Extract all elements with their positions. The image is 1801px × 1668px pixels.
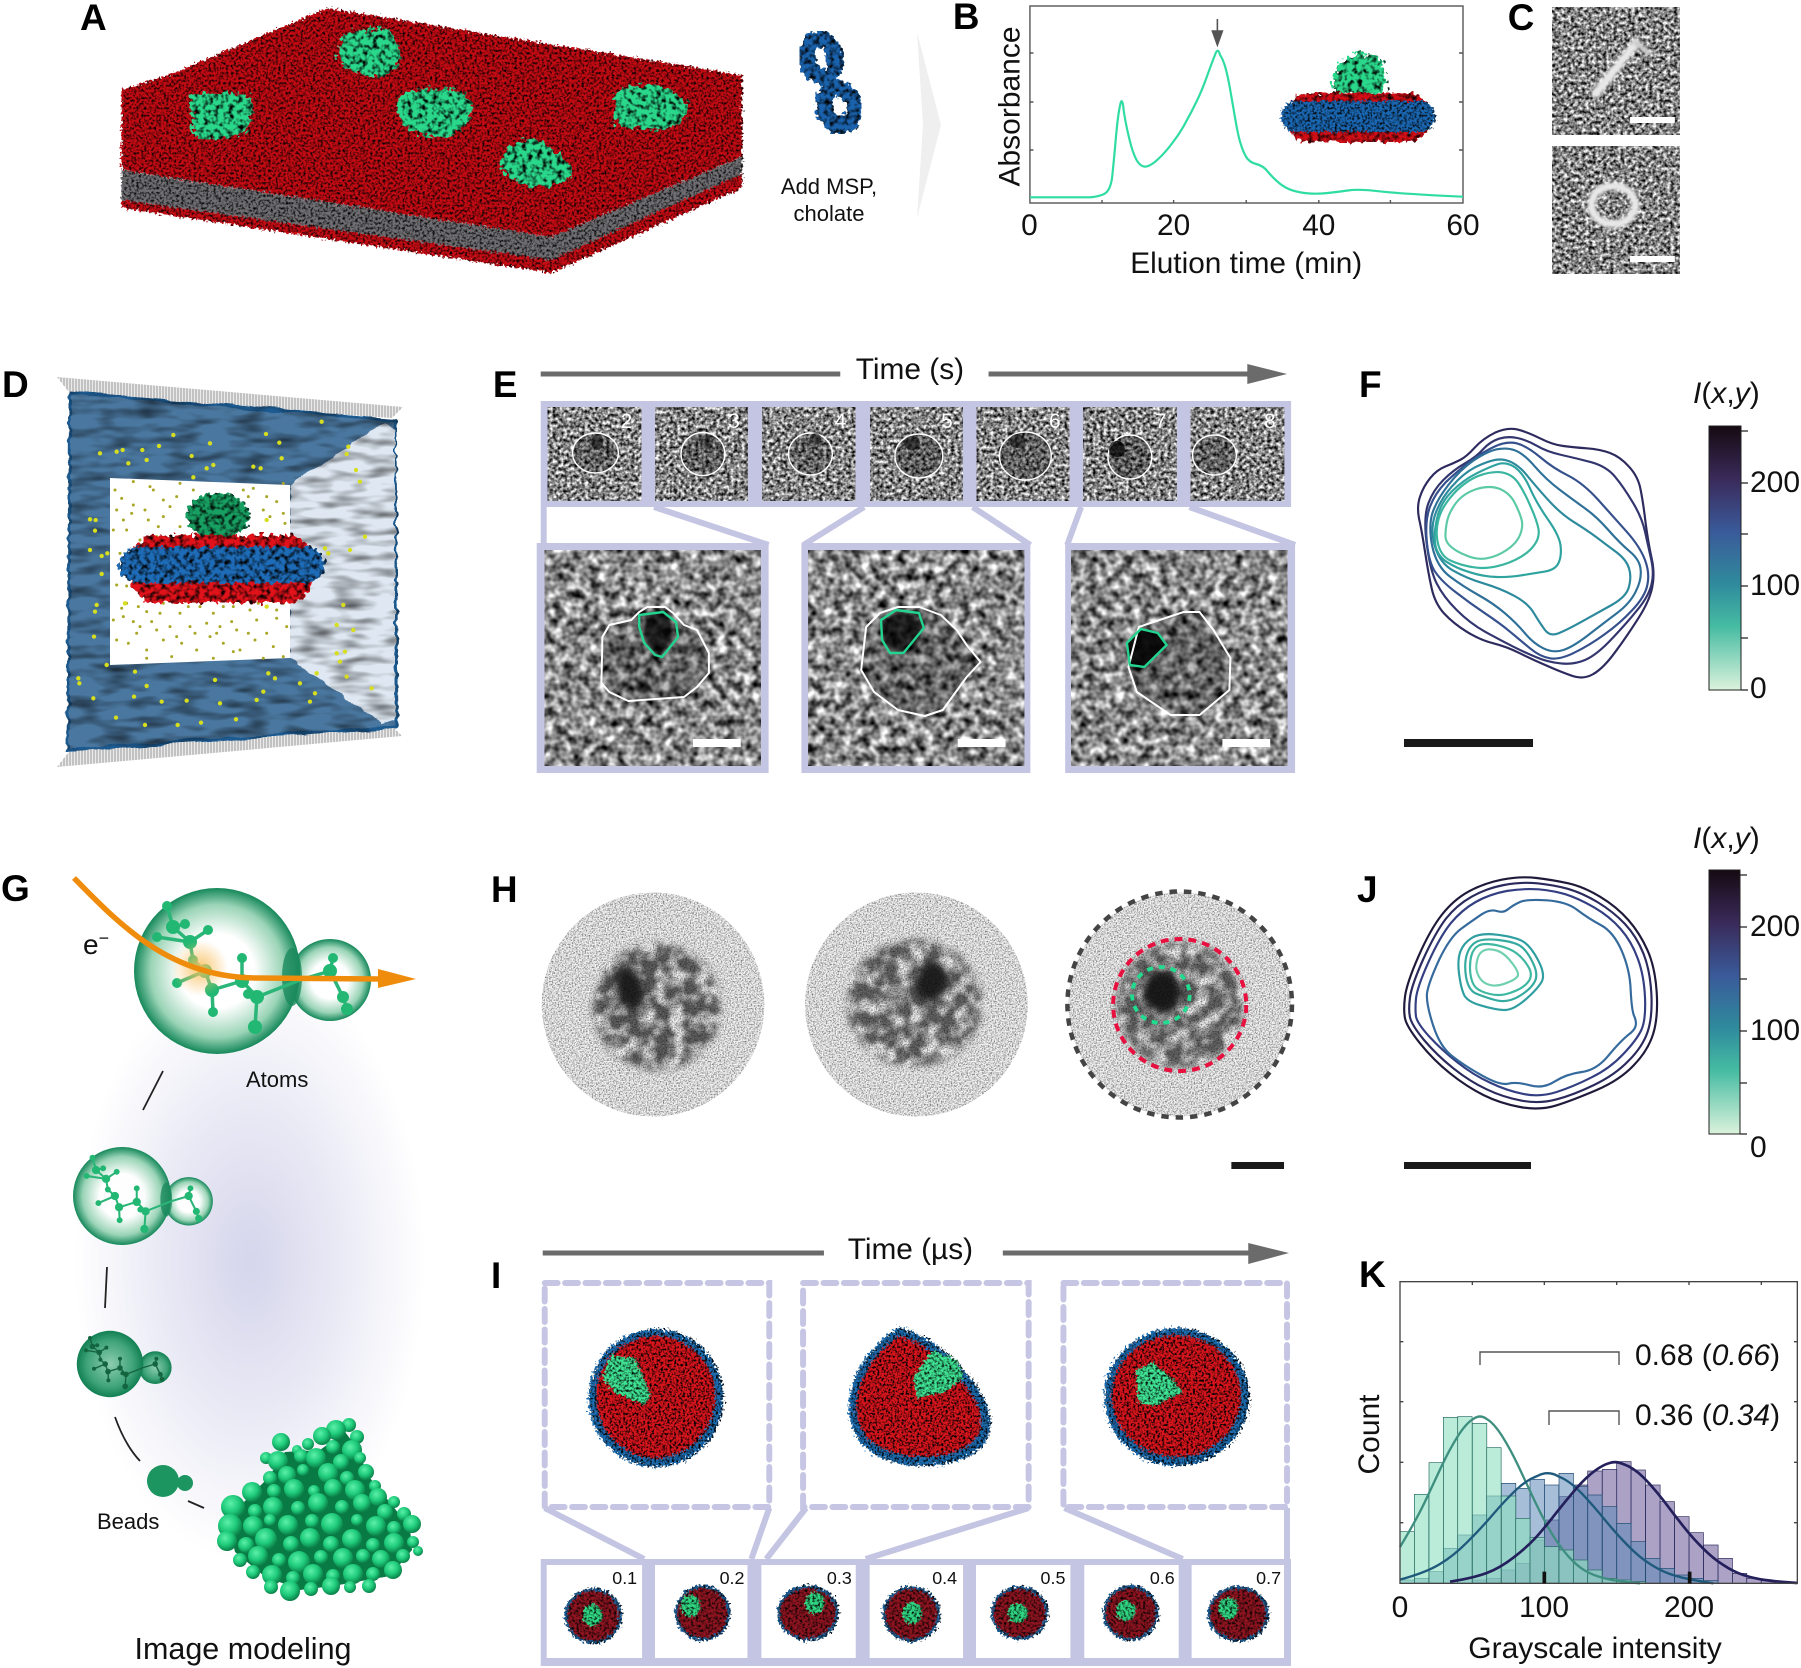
panel K: grayscale histogram <box>1353 1254 1797 1665</box>
window <box>110 478 290 665</box>
water particles <box>78 422 372 725</box>
MSP protein <box>803 36 858 129</box>
strip frames: 0.2: 0.2 <box>720 1568 744 1588</box>
strip frames: 0.6: 0.6 <box>1150 1568 1175 1588</box>
colour bar <box>1709 426 1800 705</box>
text: Add MSP, cholate <box>781 174 877 226</box>
plot axes <box>1029 6 1463 203</box>
text: Add MSP, cholate: cholate <box>794 201 864 226</box>
strip frames: 0.1 <box>565 1568 637 1644</box>
arrow: process chevron <box>917 32 941 218</box>
text: Beads: Beads <box>97 1509 159 1534</box>
time arrow <box>543 1243 1289 1264</box>
panel G: image modeling schematic <box>1 868 425 1666</box>
arrow: electron beam <box>74 878 416 988</box>
enlarged micrograph 2 <box>801 543 1030 773</box>
scale bar <box>1404 739 1533 747</box>
connector 3 <box>115 1417 140 1461</box>
colour bar title: I(x,y) <box>1693 377 1760 410</box>
colour bar: 0 <box>1750 1131 1767 1164</box>
axes <box>1400 1282 1797 1583</box>
label G: G <box>1 868 30 909</box>
strip frames: 0.6 <box>1103 1568 1175 1641</box>
frame 8 s: 8 <box>1264 410 1276 433</box>
strip frames: 0.5: 0.5 <box>1041 1568 1065 1588</box>
simulated image 3 with regions <box>1067 892 1292 1118</box>
ratio brackets <box>1480 1352 1619 1425</box>
text: electron: e <box>83 929 99 960</box>
connectors to strip <box>545 1508 1287 1559</box>
connector 4 <box>188 1501 204 1508</box>
nanodisc in box <box>119 493 325 603</box>
label K: K <box>1359 1254 1386 1295</box>
label E: E <box>493 364 518 405</box>
colour bar: 200 <box>1750 910 1800 943</box>
panel E: time series of micrographs <box>493 353 1295 773</box>
x axis title: Elution time (min) <box>1130 247 1362 280</box>
frame 5 s: 5 <box>941 410 953 433</box>
x tick labels: 60 <box>1446 209 1480 242</box>
strip frames: 0.5 <box>991 1568 1065 1640</box>
beads <box>147 1465 193 1497</box>
bubble stage 2 <box>73 1147 213 1245</box>
panel I: simulation time series <box>491 1233 1291 1666</box>
text: Atoms: Atoms <box>246 1067 308 1092</box>
label D: D <box>2 364 29 405</box>
strip frame <box>541 401 1291 507</box>
background glow <box>75 962 425 1562</box>
y axis title: Count <box>1353 1394 1386 1475</box>
label H: H <box>491 869 518 910</box>
dashed frames <box>545 1283 1287 1507</box>
bead cluster protein <box>217 1418 423 1601</box>
inset nanodisc <box>1281 54 1435 142</box>
electron scattering glow <box>172 940 228 996</box>
x axis title: Grayscale intensity <box>1468 1632 1722 1665</box>
frame 4 s <box>762 407 855 501</box>
panel D: simulation box <box>2 364 403 767</box>
colour bar: 100 <box>1750 569 1800 602</box>
membrane bilayer <box>121 8 742 273</box>
frame 3 s: 3 <box>728 410 740 433</box>
micrograph side view <box>1552 7 1680 135</box>
frame 7 s: 7 <box>1155 410 1167 433</box>
text: electron: − <box>99 928 109 948</box>
purple histogram <box>1472 1462 1776 1583</box>
colour bar: 0 <box>1750 672 1767 705</box>
caption: Image modeling: Image modeling <box>134 1632 352 1666</box>
green histogram <box>1400 1417 1645 1583</box>
colour bar: 100 <box>1750 1014 1800 1047</box>
panel A: lipid membrane with proteins <box>80 0 941 273</box>
frame 2 s: 2 <box>621 410 632 433</box>
scale bar <box>1404 1162 1531 1169</box>
blue box walls <box>68 393 397 750</box>
strip frames: 0.3: 0.3 <box>827 1568 852 1588</box>
simulated image 1 <box>542 892 764 1116</box>
time arrow <box>541 364 1287 384</box>
frame strip <box>541 1559 1291 1666</box>
panel H: simulated images <box>491 869 1292 1169</box>
histogram and fits <box>1400 1282 1797 1583</box>
contour lines <box>1404 877 1657 1108</box>
x tick labels: 40 <box>1302 209 1335 242</box>
strip frames: 0.1: 0.1 <box>612 1568 637 1588</box>
atoms bubble (large) <box>134 888 371 1054</box>
panel C: micrographs <box>1508 0 1680 274</box>
scale bar <box>1231 1162 1284 1169</box>
frame 4 s: 4 <box>835 410 847 433</box>
colour bar <box>1709 870 1800 1164</box>
strip frames: 0.2 <box>675 1568 744 1641</box>
micrograph top view <box>1552 146 1680 274</box>
enlarged micrograph 3 <box>1065 543 1295 773</box>
strip frames: 0.4 <box>883 1568 957 1642</box>
connector 2 <box>105 1267 107 1308</box>
simulated disc 3 <box>1104 1328 1249 1466</box>
blue histogram <box>1400 1473 1718 1583</box>
panel J: simulated contour map <box>1357 822 1800 1169</box>
x tick labels <box>1392 1591 1714 1624</box>
heading: Time (µs): Time (µs) <box>848 1233 973 1266</box>
peak arrow <box>1212 19 1222 45</box>
x tick labels: 0 <box>1392 1591 1408 1624</box>
bubble stage 3 <box>77 1331 172 1397</box>
x tick labels <box>1021 209 1480 242</box>
frame 6 s <box>977 407 1069 501</box>
x tick labels: 0 <box>1021 209 1038 242</box>
frame 8 s <box>1191 407 1284 501</box>
strip frames: 0.4: 0.4 <box>932 1568 957 1588</box>
label I: I <box>491 1255 501 1296</box>
strip frames: 0.7 <box>1208 1568 1281 1642</box>
panel F: experimental contour map <box>1359 364 1800 747</box>
label J: J <box>1357 869 1378 910</box>
frame 6 s: 6 <box>1049 410 1061 433</box>
text: Add MSP, cholate: Add MSP, <box>781 174 877 199</box>
connector 1 <box>143 1071 163 1110</box>
simulated disc 1 <box>588 1329 724 1467</box>
contour lines <box>1418 429 1654 677</box>
strip frames: 0.3 <box>777 1568 852 1641</box>
heading: Time (s): Time (s) <box>856 353 964 386</box>
x tick labels: 20 <box>1157 209 1190 242</box>
mesh sheets <box>57 377 403 767</box>
ratio text 2: 0.36 (0.34) <box>1635 1399 1780 1432</box>
colour bar title: I(x,y) <box>1693 822 1760 855</box>
simulated image 2 <box>805 892 1028 1116</box>
x tick labels: 100 <box>1519 1591 1569 1624</box>
enlarged micrograph 1 <box>537 543 769 773</box>
label F: F <box>1359 364 1382 405</box>
zoom connectors <box>544 507 1295 545</box>
frame 3 s <box>655 407 748 501</box>
frame 5 s <box>870 407 963 501</box>
fit curves <box>1400 1416 1797 1583</box>
y axis title: Absorbance <box>994 26 1026 187</box>
simulated disc 2 <box>849 1327 991 1466</box>
x tick labels: 200 <box>1664 1591 1714 1624</box>
panel B: elution chromatogram <box>953 0 1480 280</box>
elution curve <box>1030 51 1463 197</box>
ratio text 1: 0.68 (0.66) <box>1635 1339 1780 1372</box>
frame 2 s <box>548 407 641 501</box>
frame 7 s <box>1083 407 1177 501</box>
strip frames: 0.7: 0.7 <box>1256 1568 1281 1588</box>
membrane proteins <box>189 29 689 187</box>
colour bar: 200 <box>1750 466 1800 499</box>
